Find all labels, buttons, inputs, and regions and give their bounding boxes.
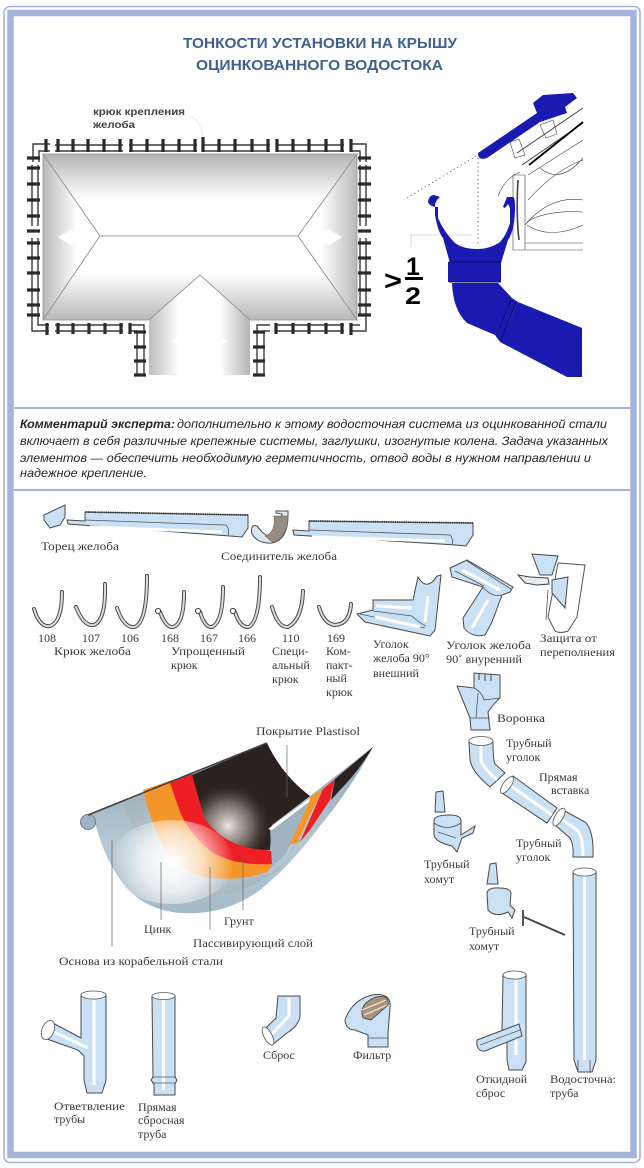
label: хомут bbox=[424, 872, 455, 886]
label: Уголок bbox=[373, 637, 409, 651]
part: gutter hooks bbox=[34, 576, 351, 627]
label: Уголок желоба bbox=[446, 638, 532, 652]
label bbox=[424, 857, 470, 886]
part: layered gutter cross section bbox=[59, 724, 373, 968]
title: ОЦИНКОВАННОГО ВОДОСТОКА bbox=[196, 57, 443, 74]
label: трубы bbox=[54, 1112, 85, 1126]
part: straight outlet pipe bbox=[138, 992, 185, 1141]
label: more than one half: > bbox=[384, 265, 402, 296]
label bbox=[469, 924, 515, 953]
hook numbers and labels: крюк bbox=[272, 672, 299, 686]
label: желоба 90° bbox=[372, 651, 430, 665]
label: plastisol bbox=[256, 724, 361, 797]
panel: roof plan with gutter hooks bbox=[27, 107, 371, 375]
label: gutter hook: крюк крепления bbox=[93, 107, 185, 118]
label: plastisol: Покрытие Plastisol bbox=[256, 724, 361, 738]
label bbox=[446, 638, 532, 666]
label: Воронка bbox=[497, 711, 546, 725]
hook numbers and labels: Ком- bbox=[326, 644, 351, 658]
label: Соединитель желоба bbox=[221, 549, 338, 563]
label: passivating layer bbox=[193, 867, 314, 950]
part: second pipe clamp and nail bbox=[469, 863, 565, 953]
part: first pipe clamp bbox=[424, 791, 475, 886]
label: Водосточна: bbox=[550, 1072, 616, 1086]
label bbox=[54, 1099, 125, 1126]
hook numbers and labels: Специ- bbox=[272, 644, 309, 658]
label: Сброс bbox=[263, 1048, 295, 1062]
label: Прямая bbox=[138, 1100, 177, 1114]
rolled bead bbox=[80, 814, 96, 830]
expert comment: включает в себя различные крепежные системы, заглушки, изогнутые колена. Задача указанных bbox=[20, 434, 609, 448]
hook numbers and labels: крюк bbox=[171, 658, 198, 672]
part: gutter end cap and first gutter bbox=[41, 505, 248, 553]
label: сбросная bbox=[138, 1113, 185, 1127]
label: gutter hook bbox=[92, 107, 203, 136]
expert comment bbox=[20, 417, 609, 480]
roof surfaces bbox=[43, 154, 357, 375]
hook numbers and labels: Крюк желоба bbox=[54, 644, 132, 658]
label: Фильтр bbox=[353, 1048, 391, 1062]
part: pipe branch bbox=[39, 991, 125, 1126]
part: second pipe elbow bbox=[516, 806, 593, 864]
hook numbers and labels: 106 bbox=[121, 631, 139, 645]
roof structure sketch bbox=[498, 108, 583, 250]
label: primer bbox=[224, 855, 254, 928]
hook numbers and labels: 167 bbox=[200, 631, 218, 645]
hook numbers and labels: крюк bbox=[326, 685, 353, 699]
label: Прямая bbox=[539, 770, 578, 784]
label: уголок bbox=[516, 850, 550, 864]
label bbox=[506, 736, 552, 764]
label: труба bbox=[138, 1127, 167, 1141]
part: outlet elbow bbox=[260, 996, 300, 1062]
label: хомут bbox=[469, 939, 500, 953]
label: zinc bbox=[144, 862, 172, 936]
hook numbers and labels: ный bbox=[326, 671, 347, 685]
title bbox=[183, 35, 458, 74]
label bbox=[372, 637, 430, 680]
red layer bbox=[170, 774, 272, 864]
hook numbers and labels: 107 bbox=[82, 631, 100, 645]
part: funnel bbox=[457, 673, 546, 730]
hook numbers and labels: 169 bbox=[327, 631, 345, 645]
label: Защита от bbox=[540, 631, 598, 645]
hook numbers and labels: альный bbox=[272, 658, 310, 672]
label: more than one half: 2 bbox=[405, 283, 421, 310]
label bbox=[138, 1100, 185, 1141]
diagram: roof edge and blue gutter section bbox=[407, 93, 583, 377]
label: Трубный bbox=[424, 857, 470, 871]
part: filter bbox=[345, 995, 391, 1062]
steel base bbox=[88, 743, 373, 913]
part: main downpipe bbox=[550, 868, 616, 1100]
label: Трубный bbox=[469, 924, 515, 938]
label: вставка bbox=[551, 783, 590, 797]
label: переполнения bbox=[540, 645, 616, 659]
label: gutter hook: желоба bbox=[92, 119, 135, 131]
part: inner corner bbox=[446, 560, 532, 666]
part: gutter connector and second gutter bbox=[221, 511, 473, 563]
label: Трубный bbox=[506, 736, 552, 750]
hook numbers and labels: 110 bbox=[282, 631, 300, 645]
expert comment: надежное крепление. bbox=[20, 466, 147, 480]
hook numbers and labels bbox=[38, 631, 353, 699]
expert comment: элементов — обеспечить необходимую герметичность, отвод воды в нужном направлении и bbox=[20, 451, 591, 465]
label: Трубный bbox=[516, 836, 562, 850]
label bbox=[540, 631, 616, 659]
label bbox=[476, 1072, 528, 1100]
label: труба bbox=[550, 1086, 579, 1100]
blue downpipe and gutter bbox=[428, 93, 582, 377]
expert comment: Комментарий эксперта: bbox=[20, 417, 175, 431]
hook numbers and labels: пакт- bbox=[326, 658, 353, 672]
part: straight insert bbox=[498, 770, 590, 823]
orange layer bbox=[143, 780, 276, 879]
label: уголок bbox=[506, 750, 540, 764]
label: primer: Грунт bbox=[224, 914, 254, 928]
label: Торец желоба bbox=[41, 539, 120, 553]
label: steel base: Основа из корабельной стали bbox=[59, 954, 224, 968]
part: flap outlet bbox=[476, 971, 528, 1100]
hook numbers and labels: 168 bbox=[161, 631, 179, 645]
zinc layer bbox=[123, 793, 320, 897]
label: Откидной bbox=[476, 1072, 528, 1086]
part: first pipe elbow bbox=[469, 736, 552, 787]
label: more than one half bbox=[384, 253, 423, 310]
label bbox=[516, 836, 562, 864]
label: more than one half: 1 bbox=[406, 253, 420, 281]
title: ТОНКОСТИ УСТАНОВКИ НА КРЫШУ bbox=[183, 35, 458, 52]
roof arrows bbox=[58, 230, 342, 347]
label: 90˚ внуренний bbox=[446, 652, 523, 666]
highlight bbox=[110, 820, 234, 904]
right edge bands bbox=[288, 789, 323, 845]
part: outer corner bbox=[357, 575, 441, 680]
dotted guides bbox=[407, 155, 478, 245]
part: overflow guard bbox=[518, 554, 616, 659]
inner dark coating bbox=[192, 743, 310, 850]
hook numbers and labels: Упрощенный bbox=[171, 644, 246, 658]
label: passivating layer: Пассивирующий слой bbox=[193, 936, 314, 950]
label bbox=[550, 1072, 616, 1100]
label: Ответвление bbox=[54, 1099, 125, 1113]
label: сброс bbox=[476, 1086, 505, 1100]
hook numbers and labels: 166 bbox=[238, 631, 256, 645]
hook numbers and labels: 108 bbox=[38, 631, 56, 645]
label: внешний bbox=[373, 666, 419, 680]
gutter line with hooks bbox=[32, 144, 366, 375]
expert comment: дополнительно к этому водосточная система из оцинкованной стали bbox=[177, 417, 607, 431]
label bbox=[539, 770, 590, 797]
label: zinc: Цинк bbox=[144, 922, 172, 936]
